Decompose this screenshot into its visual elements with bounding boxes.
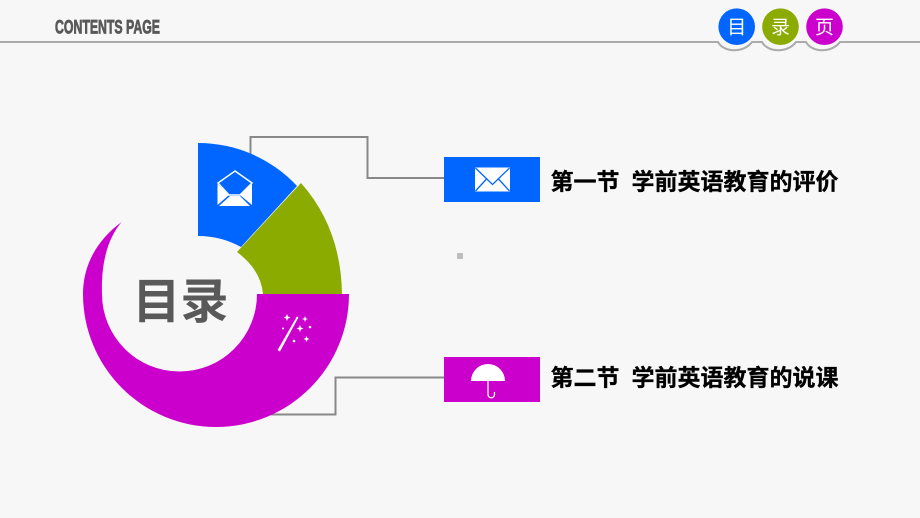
- icon: magic wand: [278, 314, 311, 351]
- header badges: [718, 8, 843, 45]
- connector: top: [250, 137, 444, 178]
- badge: 录: 录: [771, 18, 790, 38]
- icon: umbrella: [471, 364, 505, 398]
- ring chart: [83, 143, 349, 427]
- badge: 目: 目: [727, 18, 746, 38]
- center dot: [457, 253, 463, 259]
- item 1: [444, 157, 838, 202]
- connector: bottom: [268, 378, 444, 414]
- segment: magenta: [83, 222, 349, 427]
- icon: envelope: [475, 168, 510, 192]
- icon: open envelope: [218, 171, 252, 206]
- item 1 label: 第一节: [550, 168, 620, 194]
- segment: blue: [198, 143, 297, 247]
- item 2: [444, 357, 838, 402]
- item 2 label: 第二节: [550, 364, 620, 390]
- badge: 页: 页: [815, 18, 834, 38]
- segment: green: [237, 183, 342, 294]
- item 1 label: 学前英语教育的评价: [632, 168, 838, 194]
- center title: 目录: [132, 276, 229, 329]
- title: contents page: CONTENTS PAGE: [55, 18, 160, 38]
- header rule: [0, 42, 920, 50]
- item 1 icon box: [444, 157, 540, 202]
- item 2 label: 学前英语教育的说课: [632, 364, 838, 390]
- item 2 icon box: [444, 357, 540, 402]
